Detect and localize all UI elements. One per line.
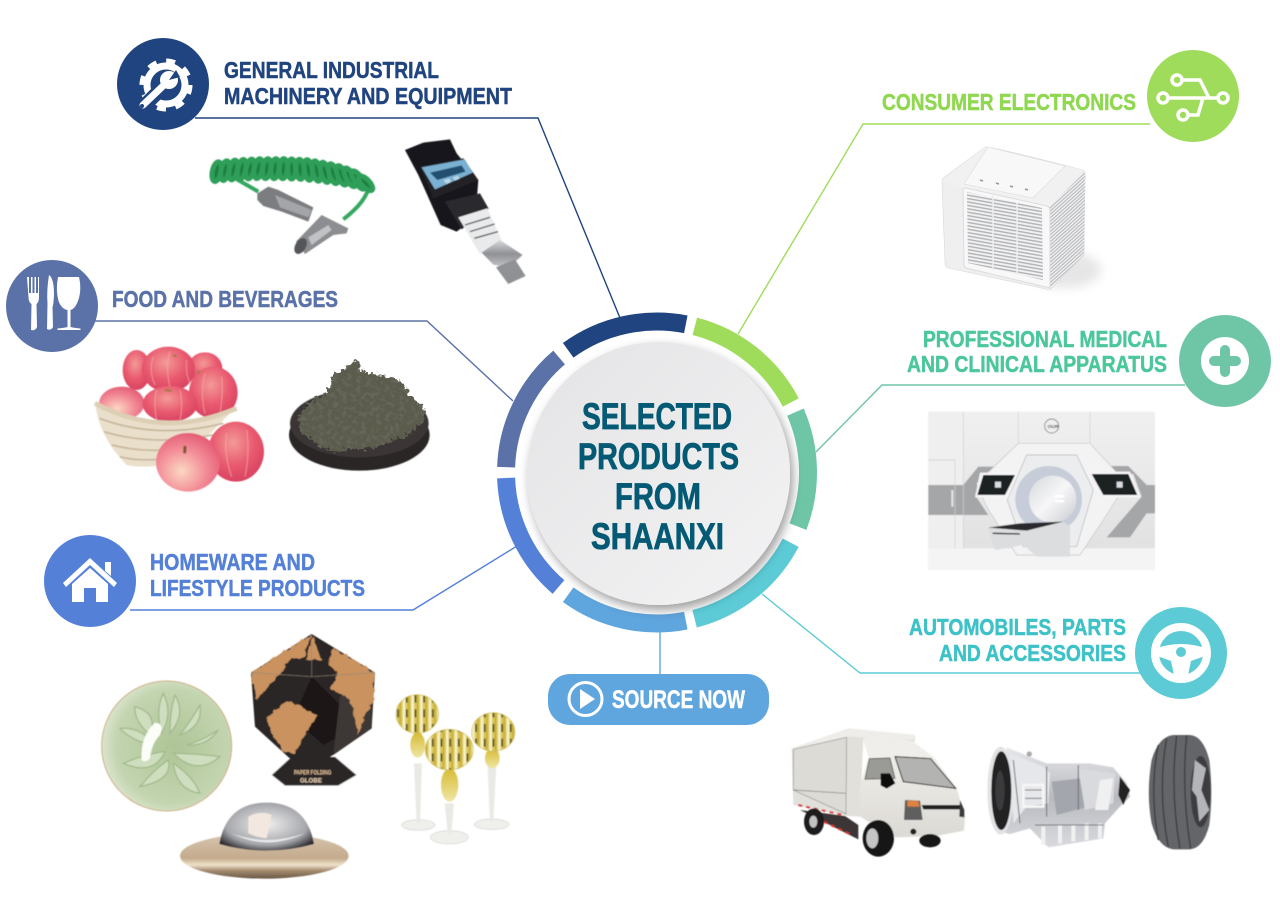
- title: selected products from Shaanxi: [578, 396, 739, 557]
- product: paper folding globe: PAPER FOLDING: [294, 769, 331, 776]
- heading: general industrial machinery and equipment: MACHINERY AND EQUIPMENT: [224, 83, 513, 109]
- heading: automobiles, parts and accessories: AUTOMOBILES, PARTS: [909, 614, 1126, 640]
- product: coiled green cable: [210, 158, 375, 256]
- product: apples in a basket: [95, 347, 264, 492]
- icon: house: [44, 535, 136, 627]
- button: source now: [548, 674, 769, 725]
- plug two: [292, 215, 348, 256]
- title: selected products from Shaanxi: FROM: [615, 476, 701, 517]
- title: selected products from Shaanxi: PRODUCTS: [578, 436, 739, 477]
- product: car tyre: [1149, 735, 1211, 849]
- product: paper folding globe: GLOBE: [300, 777, 322, 784]
- heading: general industrial machinery and equipment: GENERAL INDUSTRIAL: [224, 57, 439, 83]
- connector line: food and beverages: [95, 321, 513, 401]
- product: tea leaves on a plate: [289, 361, 430, 471]
- heading: homeware and lifestyle products: HOMEWARE AND: [150, 549, 315, 575]
- heading: professional medical and clinical apparatus: [907, 326, 1167, 377]
- connector line: medical: [816, 385, 1185, 452]
- product: ceramic bowl: [102, 681, 232, 811]
- icon: cutlery and glass: [6, 260, 98, 352]
- product: medical scanner: [928, 412, 1155, 570]
- connector line: homeware: [130, 546, 517, 610]
- product: pressure sensor: [405, 139, 526, 284]
- product: white box truck: [792, 728, 965, 857]
- heading: food and beverages: FOOD AND BEVERAGES: [112, 286, 338, 312]
- heading: automobiles, parts and accessories: AND ACCESSORIES: [939, 640, 1126, 666]
- product: crystal dome ornament: [180, 803, 349, 879]
- icon: circuit nodes: [1147, 50, 1239, 142]
- heading: general industrial machinery and equipment: [224, 57, 513, 109]
- plug one: [257, 187, 313, 222]
- connector line: source now: [659, 630, 661, 676]
- icon: medical cross: [1179, 315, 1271, 407]
- heading: professional medical and clinical apparatus: AND CLINICAL APPARATUS: [907, 351, 1167, 377]
- connector line: automobiles: [762, 594, 1140, 673]
- product: gold glass candle holders: [396, 695, 515, 844]
- title: selected products from Shaanxi: SELECTED: [582, 396, 732, 437]
- heading: homeware and lifestyle products: LIFESTYLE PRODUCTS: [150, 575, 365, 601]
- heading: consumer electronics: CONSUMER ELECTRONICS: [882, 89, 1136, 115]
- heading: homeware and lifestyle products: [150, 549, 365, 601]
- title: selected products from Shaanxi: SHAANXI: [591, 516, 724, 557]
- connector line: general industrial machinery: [195, 118, 620, 318]
- basket: [95, 402, 237, 467]
- heading: professional medical and clinical apparatus: PROFESSIONAL MEDICAL: [923, 326, 1167, 352]
- product: paper folding globe: [251, 634, 375, 786]
- connector line: consumer electronics: [738, 124, 1150, 334]
- heading: automobiles, parts and accessories: [909, 614, 1126, 666]
- centre disc with title: [527, 342, 790, 605]
- product: gearbox transmission: [987, 747, 1130, 847]
- icon: steering wheel: [1135, 607, 1227, 699]
- button: source now: SOURCE NOW: [612, 686, 745, 714]
- icon: play: [569, 682, 602, 716]
- segmented ring: [506, 322, 808, 623]
- product: medical scanner: OUR: [1048, 424, 1059, 430]
- icon: gear and wrench: [117, 38, 209, 130]
- product: air purifier: [942, 147, 1101, 290]
